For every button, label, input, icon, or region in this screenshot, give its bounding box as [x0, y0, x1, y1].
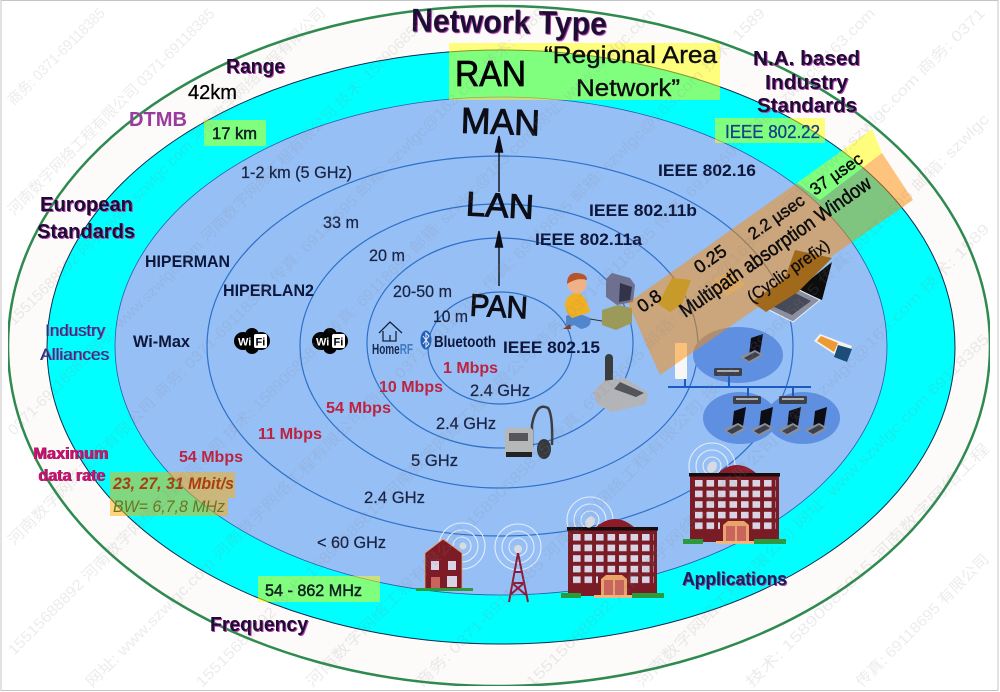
IEEE standards list: IEEE 802.15 — [503, 338, 600, 357]
icon: Bluetooth logo with label: Bluetooth — [434, 334, 496, 351]
range labels — [241, 163, 468, 326]
arrow: PAN to LAN — [496, 231, 502, 286]
heading: Industry Alliances: Alliances — [40, 345, 109, 364]
icon: Wi-Fi logo: Fi — [334, 336, 343, 348]
IEEE standards list: IEEE 802.16 — [658, 161, 756, 180]
guard interval values — [633, 149, 867, 316]
icon: Wi-Fi logo — [312, 328, 348, 354]
icon: headphones and player — [505, 407, 552, 459]
data rate and bandwidth box — [110, 472, 235, 516]
37 microsecond highlight — [797, 129, 882, 200]
frequency labels: 2.4 GHz — [470, 381, 530, 400]
guard interval values: 0.25 — [690, 241, 730, 277]
watermark text: 河南数字网络工程有限公司 0371-69118385 — [5, 5, 218, 219]
multipath caption: Multipath absorption Window — [675, 172, 876, 322]
PAN label: PAN — [469, 288, 529, 325]
range labels: 20-50 m — [393, 282, 452, 301]
guard interval values: 2.2 µsec — [745, 191, 809, 243]
icon: cordless phone — [593, 354, 648, 412]
European standards list: Wi-Max — [133, 332, 191, 351]
IEEE standards list: IEEE 802.11b — [589, 201, 697, 220]
heading: N.A. based Industry Standards — [753, 48, 860, 117]
heading: European Standards: Standards — [37, 221, 135, 243]
watermark text: 河南数字网络工程有限公司 商务: 0371-69118385 传真: 69118695 邮箱: szwlgc@163.com 技术: 1589 — [4, 4, 549, 549]
icon: network clusters — [668, 327, 840, 444]
watermark text: 15515688892 网址: www.szwlgc.com 河南数字网络工程有限公司 — [5, 4, 329, 329]
blue inner ellipse — [115, 97, 887, 595]
icon: Wi-Fi logo: Fi — [256, 336, 265, 348]
watermark text: 河南数字网络工程有限公司 15890685815 传真: 69118695 邮箱: szwlgc@163.com 网址: www.szwlgc.com 商务: 0371 — [302, 4, 989, 691]
icon: laptop — [763, 262, 832, 322]
RAN description line 2: Network” — [576, 75, 680, 102]
icon: Wi-Fi logo: Wi — [238, 336, 251, 348]
title: Network Type — [411, 2, 607, 42]
IEEE standards list — [503, 161, 756, 357]
icon: office building with dish — [561, 497, 664, 598]
heading: N.A. based Industry Standards: N.A. based — [753, 48, 860, 70]
LAN label: LAN — [465, 185, 535, 227]
guard interval values: 37 µsec — [806, 149, 867, 199]
watermark text: 网址: www.szwlgc.com 河南数字网络工程有限公司 商务: 0371-69118385 传真: 69118695 邮箱: szwlgc@163.com 技术: 1589 — [82, 4, 769, 691]
heading: Industry Alliances — [40, 321, 109, 364]
icon: gold device — [658, 278, 691, 312]
arrow: LAN to MAN — [496, 136, 502, 192]
data rate labels: 54 Mbps — [326, 400, 391, 417]
data rate labels: 10 Mbps — [379, 379, 443, 396]
watermark text: 15515688892 河南数字网络工程有限公司 邮箱: szwlgc@163.com 技术: 1589 — [523, 221, 993, 691]
frequency value: 54-862 MHz: 54 - 862 MHz — [265, 581, 362, 600]
icon: Wi-Fi logo — [234, 328, 270, 354]
frequency labels: < 60 GHz — [317, 533, 386, 552]
section heading: range: Range — [226, 56, 285, 78]
watermark text: 15515688892 河南数字网络工程有限公司 技术: 15890685815 传真: 69118695 邮箱: szwlgc@163.com 网址: www.szwlgc.com — [4, 4, 659, 659]
MAN label: MAN — [460, 100, 541, 143]
heading: N.A. based Industry Standards: Standards — [757, 95, 857, 117]
range value: 42km: 42km — [188, 82, 237, 104]
icon: radio tower — [495, 524, 541, 602]
data rate labels — [179, 360, 498, 466]
range labels: 20 m — [369, 246, 405, 265]
icon: HomeRF logo — [372, 322, 413, 358]
section heading: frequency: Frequency — [210, 614, 309, 636]
cyan band — [47, 50, 955, 644]
icon: HomeRF logo: HomeRF — [372, 341, 413, 358]
range labels: 1-2 km (5 GHz) — [241, 163, 352, 182]
European standards list: HIPERLAN2 — [223, 281, 314, 300]
range value: 17 km — [204, 120, 266, 146]
icon: Wi-Fi logo: Wi — [316, 336, 329, 348]
network bus line — [668, 376, 811, 397]
European standards list: HIPERMAN — [145, 252, 230, 271]
range labels: 33 m — [323, 213, 359, 232]
concentric range rings — [207, 156, 793, 536]
frequency value: 54-862 MHz — [258, 576, 380, 602]
heading: Maximum data rate: Maximum — [33, 444, 108, 463]
icon: gold device — [711, 270, 746, 296]
panel: multipath absorption window — [628, 129, 913, 375]
guard interval values: 0.8 — [633, 286, 665, 316]
data rate and bandwidth box: 23, 27, 31 Mbit/s — [112, 474, 234, 493]
watermark text: 传真: 69118695 有限公司 — [852, 550, 993, 691]
frequency labels — [317, 381, 530, 552]
icon: boy at computer — [563, 273, 635, 330]
RAN label: RAN — [455, 53, 526, 94]
range labels: 10 m — [433, 307, 468, 326]
data rate labels: 54 Mbps — [179, 449, 243, 466]
European standards list — [133, 252, 314, 351]
icon: PC card — [814, 334, 852, 362]
frequency labels: 2.4 GHz — [364, 488, 425, 507]
heading: European Standards: European — [40, 194, 133, 216]
range value: 17 km: 17 km — [212, 124, 257, 143]
icon: Bluetooth logo with label — [420, 330, 496, 351]
data rate labels: 11 Mbps — [258, 426, 322, 443]
panel: RAN highlight — [449, 42, 720, 102]
heading: Industry Alliances: Industry — [45, 321, 105, 340]
heading: N.A. based Industry Standards: Industry — [765, 72, 849, 94]
watermark text: 技术: 15890685815 河南数字网络工程 — [743, 441, 993, 691]
heading: network scale ladder — [460, 100, 541, 325]
watermark text: 商务: 0371-69118385 河南数字网络工程有限公司 技术: 15890685815 传真: 69118695 邮箱: szwlgc — [412, 110, 993, 691]
icon: house with antenna — [416, 523, 485, 591]
IEEE standards list: IEEE 802.11a — [535, 230, 643, 249]
data rate and bandwidth box: BW= 6,7,8 MHz — [113, 497, 225, 516]
frequency labels: 5 GHz — [411, 451, 458, 470]
heading: Maximum data rate: data rate — [38, 466, 105, 485]
watermark text: 0371-69118385 网址: www.szwlgc.com 河南数字网络工程有限公司 技术: 15890685815 — [5, 5, 439, 439]
icon: laptop lid under band — [752, 250, 832, 312]
label: DTMB: DTMB — [129, 109, 187, 131]
standard: IEEE 802.22: IEEE 802.22 — [725, 122, 820, 142]
icon: office building with dish — [683, 443, 786, 544]
data rate labels: 1 Mbps — [443, 360, 498, 377]
cyclic prefix caption: (Cyclic prefix) — [744, 236, 833, 306]
icon: monitor — [606, 273, 635, 305]
RAN description line 1: “Regional Area — [544, 42, 718, 69]
watermark text: 河南数字网络工程有限公司 网址: www.szwlgc.com 69118385 — [633, 331, 993, 691]
heading: European Standards — [37, 194, 135, 243]
section heading: applications: Applications — [682, 569, 787, 589]
heading: Maximum data rate — [33, 444, 108, 485]
watermark text: 15515688892 技术: 15890685815 河南数字网络工程有限公司 商务: 0371-69118385 传真: 69118695 邮箱: szwlgc@163.com — [192, 4, 879, 691]
frequency labels: 2.4 GHz — [436, 414, 496, 433]
